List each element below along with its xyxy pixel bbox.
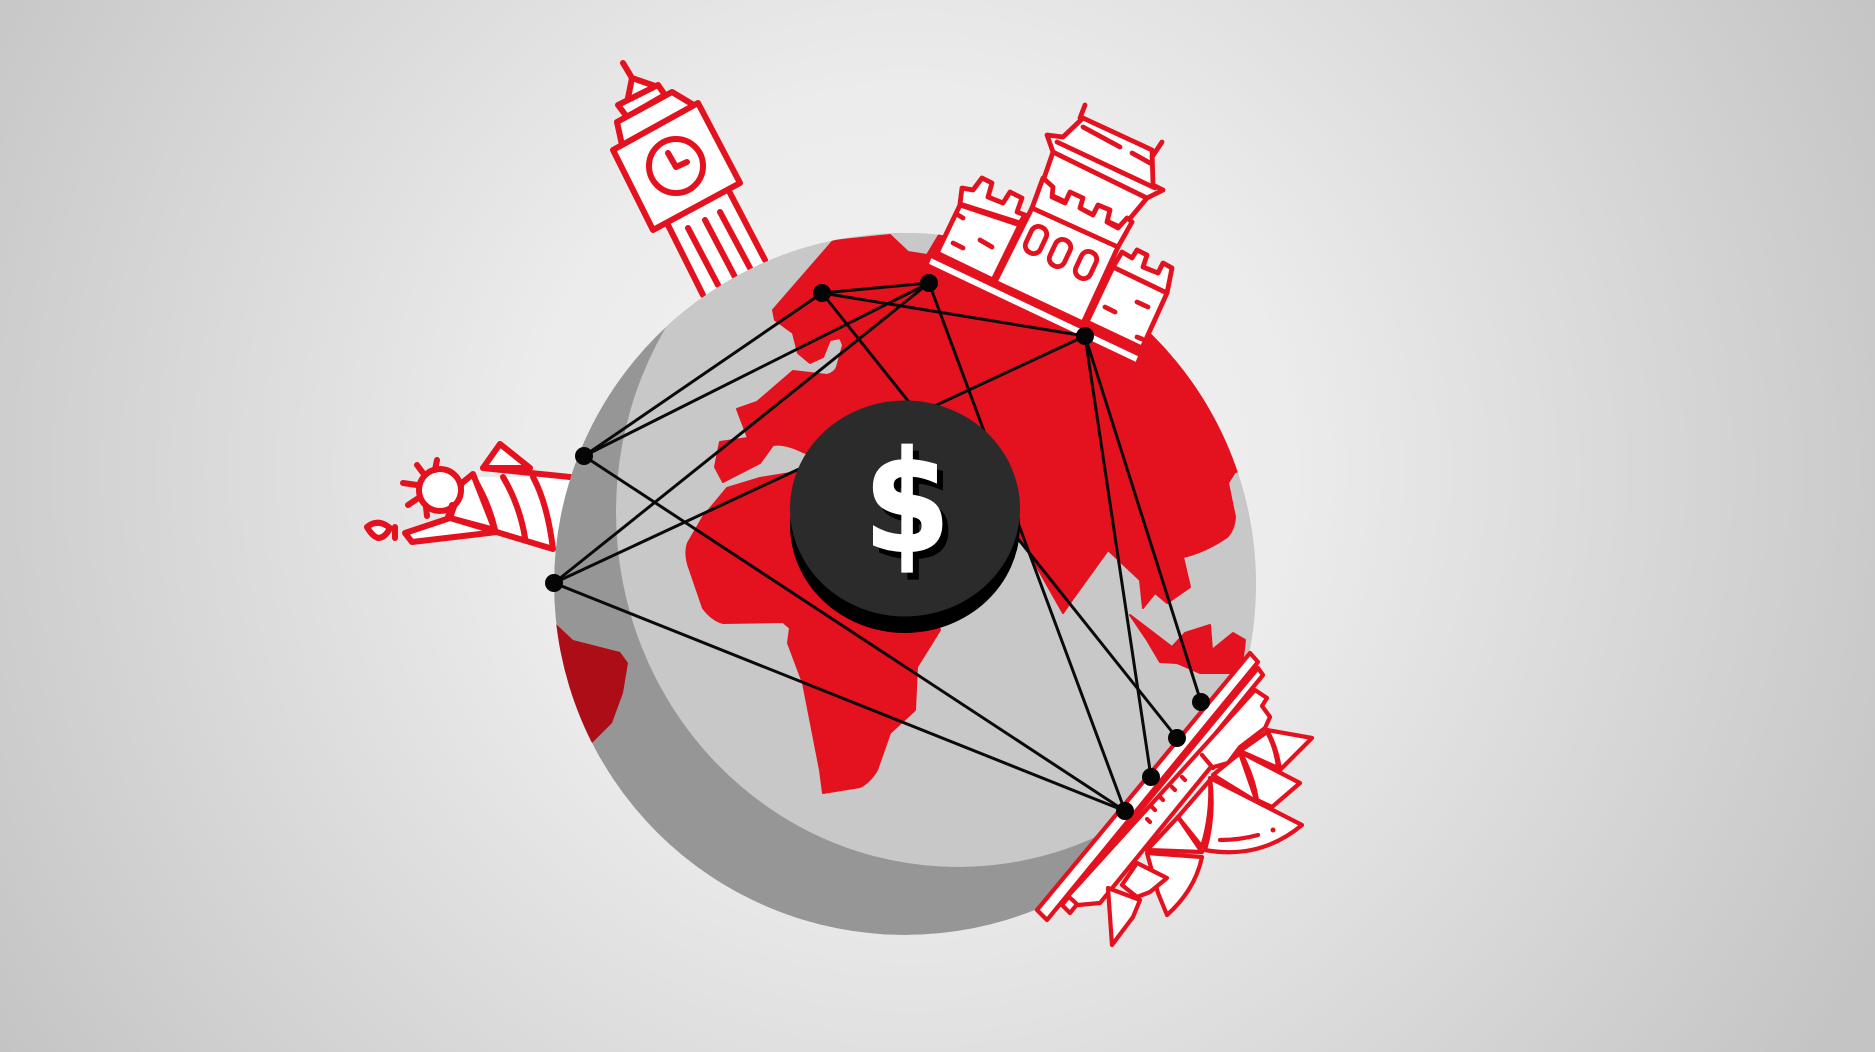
icon: Big Ben clock tower [613,63,790,330]
continent: Africa [686,472,940,793]
network connection lines [554,283,1201,811]
icon: Great Wall fortress [926,105,1172,365]
continent: Eurasia [714,234,1238,614]
icon: Sydney Opera House [1037,653,1312,945]
globe shadow side [554,233,1256,935]
icon: Statue of Liberty [367,444,620,560]
network nodes [545,274,1210,820]
continent: South America [556,624,628,743]
coin with dollar sign [790,400,1020,633]
globe [554,233,1256,935]
continent: Southeast Asia islands [1130,615,1245,673]
coin with dollar sign: $ [870,430,956,592]
globe lit side [616,233,1256,867]
dollar sign: $ [864,423,950,585]
